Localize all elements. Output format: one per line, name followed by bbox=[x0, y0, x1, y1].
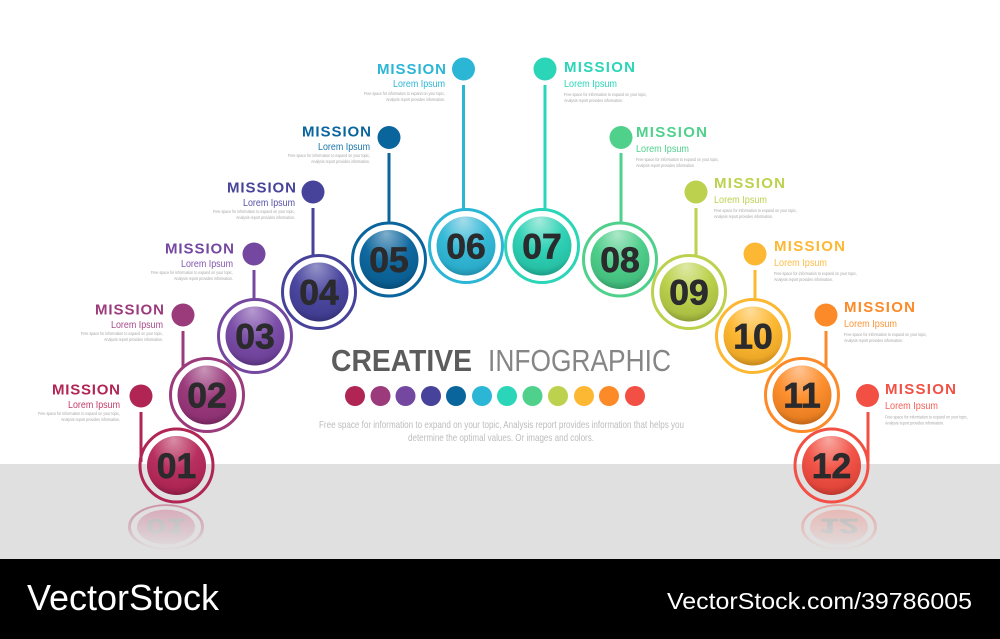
step 06 number: 06 bbox=[446, 226, 486, 266]
step 09 label: Free space for information to expand on your topic, bbox=[714, 208, 797, 213]
step 02 ring bbox=[170, 358, 244, 432]
step 07 connector bbox=[544, 85, 546, 210]
step 09 number: 09 bbox=[669, 272, 709, 312]
step 06 dot bbox=[452, 58, 475, 80]
step 09 label: MISSION bbox=[714, 175, 785, 192]
grey floor bbox=[0, 464, 1000, 559]
step 03 label: Lorem Ipsum bbox=[181, 258, 233, 270]
step 06 label: Analysis report provides information. bbox=[386, 97, 445, 102]
reflection of step 12 bbox=[802, 505, 876, 549]
step 10 label: Analysis report provides information. bbox=[774, 277, 833, 282]
step 06 ball bbox=[436, 216, 496, 276]
step 04 ball bbox=[290, 262, 348, 322]
step 01 ring bbox=[140, 429, 213, 502]
step 08 label: Analysis report provides information. bbox=[636, 163, 695, 168]
step 08 label bbox=[636, 124, 719, 168]
step 02 label: Analysis report provides information. bbox=[104, 337, 163, 342]
step 05 ball bbox=[360, 230, 418, 289]
step 01 bbox=[38, 382, 213, 502]
step 06 label: Free space for information to expand on your topic, bbox=[364, 91, 445, 96]
step 03 label: Free space for information to expand on your topic, bbox=[151, 270, 233, 275]
step 01 label: Free space for information to expand on your topic, bbox=[38, 411, 120, 416]
step 10 number: 10 bbox=[733, 316, 773, 356]
step 08 ball bbox=[590, 230, 650, 289]
step 12 number: 12 bbox=[812, 446, 851, 486]
description text bbox=[319, 419, 684, 444]
step 07 dot bbox=[534, 58, 556, 80]
step 03 ring bbox=[218, 300, 292, 372]
step 08 number: 08 bbox=[600, 240, 640, 280]
step 03 bbox=[151, 240, 292, 372]
step 09 label: Lorem Ipsum bbox=[714, 194, 767, 206]
step 11 bbox=[766, 299, 927, 432]
step 04 label: Analysis report provides information. bbox=[236, 215, 295, 220]
step 04 label bbox=[213, 180, 296, 220]
step 09 connector bbox=[694, 208, 698, 256]
step 07 label: Free space for information to expand on your topic, bbox=[564, 92, 647, 97]
step 11 label: Lorem Ipsum bbox=[844, 318, 897, 330]
watermark logo text: VectorStock bbox=[27, 577, 220, 618]
step 05 label bbox=[288, 124, 371, 164]
step 03 dot bbox=[242, 242, 266, 266]
step 11 dot bbox=[814, 304, 838, 326]
step 08 label: Free space for information to expand on your topic, bbox=[636, 157, 719, 162]
step 07 label: Analysis report provides information. bbox=[564, 98, 623, 103]
watermark image id: VectorStock.com/39786005 bbox=[667, 588, 972, 614]
reflection of step 01: 01 bbox=[146, 514, 186, 537]
step 10 label bbox=[774, 238, 857, 282]
step 06 label: MISSION bbox=[377, 61, 446, 78]
step 07 ring bbox=[506, 210, 578, 282]
title: INFOGRAPHIC bbox=[488, 344, 671, 378]
step 08 label: Lorem Ipsum bbox=[636, 143, 689, 155]
step 12 ring bbox=[795, 429, 868, 502]
step 12 connector bbox=[866, 412, 870, 462]
step 10 connector bbox=[754, 270, 756, 300]
step 12 label: Lorem Ipsum bbox=[885, 400, 938, 412]
step 06 label: Lorem Ipsum bbox=[393, 78, 445, 90]
step 03 ball bbox=[226, 306, 284, 366]
step 11 label: Analysis report provides information. bbox=[844, 338, 903, 343]
step 10 ring bbox=[716, 300, 790, 372]
step 10 label: Free space for information to expand on your topic, bbox=[774, 271, 857, 276]
step 02 label: Lorem Ipsum bbox=[111, 319, 163, 331]
step 11 connector bbox=[824, 331, 828, 367]
step 09 bbox=[652, 175, 797, 328]
step 08 label: MISSION bbox=[636, 124, 707, 141]
step 02 label: MISSION bbox=[95, 302, 164, 318]
title bbox=[331, 344, 671, 378]
step 12 bbox=[795, 381, 968, 502]
step 03 connector bbox=[252, 270, 256, 300]
step 03 label bbox=[151, 240, 234, 281]
step 04 label: MISSION bbox=[227, 180, 296, 196]
step 09 dot bbox=[684, 180, 708, 204]
step 04 bbox=[213, 180, 356, 328]
step 05 ring bbox=[352, 223, 426, 296]
step 12 label: Free space for information to expand on your topic, bbox=[885, 414, 968, 420]
step 01 label bbox=[38, 382, 120, 422]
step 04 connector bbox=[312, 208, 314, 256]
step 07 ball bbox=[512, 216, 572, 276]
step 03 label: MISSION bbox=[165, 240, 234, 258]
step 02 number: 02 bbox=[187, 376, 227, 416]
step 05 label: Free space for information to expand on your topic, bbox=[288, 153, 370, 158]
step 07 number: 07 bbox=[522, 226, 562, 266]
watermark footer bar bbox=[0, 559, 1000, 639]
step 12 label bbox=[885, 381, 968, 426]
step 08 connector bbox=[620, 153, 622, 224]
step 01 label: MISSION bbox=[52, 382, 120, 398]
reflection fade overlay left bbox=[120, 504, 212, 552]
step 12 label: Analysis report provides information. bbox=[885, 420, 944, 426]
step 04 ring bbox=[282, 256, 356, 328]
step 11 ball bbox=[772, 366, 832, 424]
step 02 connector bbox=[182, 331, 184, 367]
background: white upper area bbox=[0, 0, 1000, 464]
step 05 bbox=[288, 124, 426, 296]
step 12 ball bbox=[802, 436, 861, 495]
step 08 dot bbox=[610, 126, 632, 149]
step 11 label bbox=[844, 299, 927, 343]
step 02 dot bbox=[172, 304, 194, 326]
step 03 number: 03 bbox=[235, 316, 275, 356]
step 04 dot bbox=[302, 180, 324, 204]
reflection of step 12: 12 bbox=[819, 514, 859, 537]
step 08 ring bbox=[584, 223, 656, 296]
step 01 label: Analysis report provides information. bbox=[61, 417, 120, 422]
step 07 label bbox=[564, 59, 647, 103]
step 06 label bbox=[364, 61, 446, 102]
step 01 connector bbox=[140, 412, 142, 462]
step 05 number: 05 bbox=[369, 240, 409, 280]
step 02 label bbox=[81, 302, 164, 342]
step 04 number: 04 bbox=[299, 272, 339, 312]
step 02 bbox=[81, 302, 244, 432]
step 12 dot bbox=[856, 384, 879, 407]
step 07 label: Lorem Ipsum bbox=[564, 78, 617, 90]
step 09 label: Analysis report provides information. bbox=[714, 214, 773, 219]
step 09 label bbox=[714, 175, 797, 219]
step 09 ball bbox=[660, 262, 718, 322]
colour legend dots bbox=[345, 386, 645, 406]
reflection of step 01 bbox=[130, 505, 202, 549]
step 11 number: 11 bbox=[783, 376, 821, 416]
step 11 label: MISSION bbox=[844, 299, 915, 316]
step 05 label: Lorem Ipsum bbox=[318, 141, 370, 153]
step 09 ring bbox=[652, 256, 726, 328]
step 12 label: MISSION bbox=[885, 381, 956, 398]
step 10 label: MISSION bbox=[774, 238, 845, 255]
step 06 bbox=[364, 58, 502, 282]
step 01 label: Lorem Ipsum bbox=[68, 399, 120, 411]
step 10 label: Lorem Ipsum bbox=[774, 257, 827, 269]
reflection fade overlay right bbox=[793, 504, 885, 552]
step 11 ring bbox=[766, 358, 838, 432]
step 06 ring bbox=[430, 210, 502, 282]
step 10 ball bbox=[724, 306, 782, 366]
step 08 bbox=[584, 124, 719, 296]
step 05 label: Analysis report provides information. bbox=[311, 159, 370, 164]
title: CREATIVE bbox=[331, 344, 472, 378]
step 07 bbox=[506, 58, 647, 282]
step 10 bbox=[716, 238, 857, 372]
step 01 ball bbox=[147, 436, 206, 495]
step 04 label: Free space for information to expand on your topic, bbox=[213, 209, 295, 214]
step 05 dot bbox=[378, 126, 400, 149]
step 05 label: MISSION bbox=[302, 124, 371, 140]
step 05 connector bbox=[388, 153, 390, 224]
step 02 label: Free space for information to expand on your topic, bbox=[81, 331, 163, 336]
step 04 label: Lorem Ipsum bbox=[243, 197, 295, 209]
step 01 number: 01 bbox=[157, 446, 196, 486]
step 11 label: Free space for information to expand on your topic, bbox=[844, 332, 927, 337]
description text: Free space for information to expand on your topic, Analysis report provides information that helps you bbox=[319, 419, 684, 431]
step 07 label: MISSION bbox=[564, 59, 635, 76]
step 02 ball bbox=[178, 366, 236, 424]
step 03 label: Analysis report provides information. bbox=[174, 276, 233, 281]
step 06 connector bbox=[462, 85, 465, 210]
description text: determine the optimal values. Or images and colors. bbox=[408, 432, 594, 444]
step 10 dot bbox=[744, 242, 766, 266]
step 01 dot bbox=[130, 384, 152, 408]
